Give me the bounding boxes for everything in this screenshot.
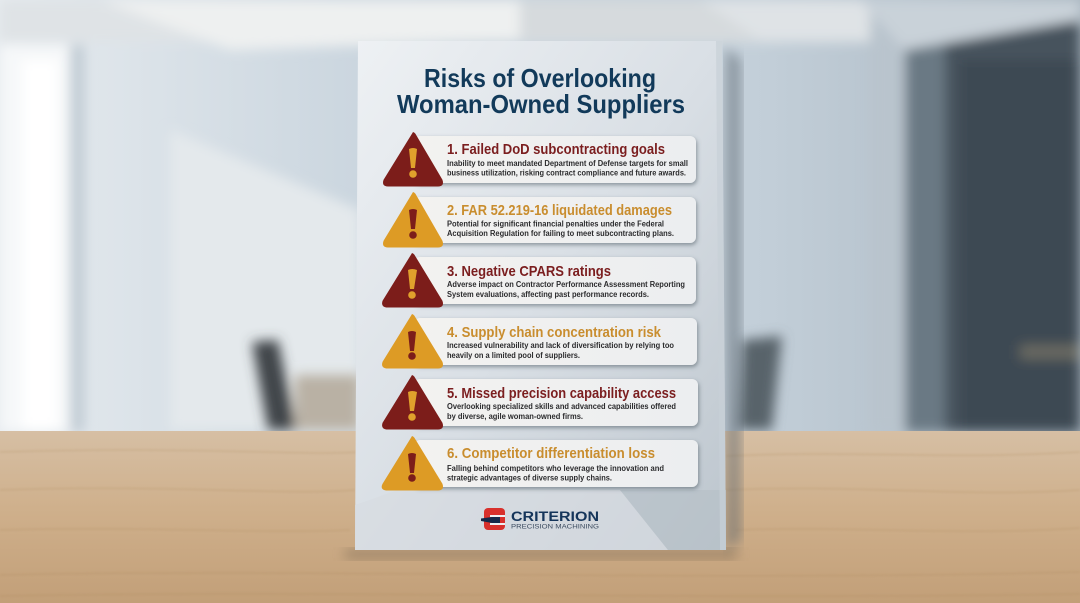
logo: Criterion Precision Machining: CRITERION (511, 509, 599, 524)
risk row 1: Inability to meet mandated Department of Defense targets for small (447, 158, 688, 168)
background: wooden table (0, 431, 1080, 603)
icon: warning triangle amber (384, 193, 442, 247)
risk row 3: 3. Negative CPARS ratings (447, 263, 611, 280)
title: Risks of Overlooking (424, 63, 656, 93)
risk row 6 (382, 437, 698, 490)
icon: warning triangle red (384, 133, 442, 186)
icon: logo mark (481, 508, 505, 530)
risk row 1 (384, 133, 696, 186)
risk row 2: 2. FAR 52.219-16 liquidated damages (447, 202, 672, 219)
title (397, 63, 685, 119)
icon: warning triangle amber (382, 437, 442, 490)
risk row 4: Increased vulnerability and lack of diversification by relying too (447, 340, 674, 350)
risk row 4: 4. Supply chain concentration risk (447, 324, 662, 341)
risk row 2: Potential for significant financial penalties under the Federal (447, 218, 664, 228)
risk row 5: 5. Missed precision capability access (447, 385, 676, 402)
risk row 4 (383, 315, 697, 368)
risk row 1: business utilization, risking contract compliance and future awards. (447, 168, 686, 178)
risk row 3: System evaluations, affecting past performance records. (447, 289, 649, 299)
risk row 6: Falling behind competitors who leverage the innovation and (447, 463, 664, 473)
risk row 2 (384, 193, 696, 247)
logo: Criterion Precision Machining (481, 508, 599, 530)
icon: warning triangle red (383, 254, 442, 307)
risk row 2: Acquisition Regulation for failing to meet subcontracting plans. (447, 228, 674, 238)
background: blurred office (0, 0, 1080, 432)
icon: warning triangle red (383, 376, 442, 429)
risk row 6: 6. Competitor differentiation loss (447, 445, 655, 462)
risk row 5: by diverse, agile woman-owned firms. (447, 411, 583, 421)
risk row 5 (383, 376, 698, 429)
risk row 1: 1. Failed DoD subcontracting goals (447, 141, 665, 158)
risk row 3 (383, 254, 696, 307)
risk row 5: Overlooking specialized skills and advanced capabilities offered (447, 401, 676, 411)
logo: Criterion Precision Machining: PRECISION MACHINING (511, 524, 599, 530)
risk row 6: strategic advantages of diverse supply chains. (447, 472, 612, 482)
icon: warning triangle amber (383, 315, 442, 368)
title: Woman-Owned Suppliers (397, 89, 685, 119)
risk row 4: heavily on a limited pool of suppliers. (447, 350, 580, 360)
panel: standing sign card (355, 41, 741, 550)
risk row 3: Adverse impact on Contractor Performance Assessment Reporting (447, 279, 685, 289)
